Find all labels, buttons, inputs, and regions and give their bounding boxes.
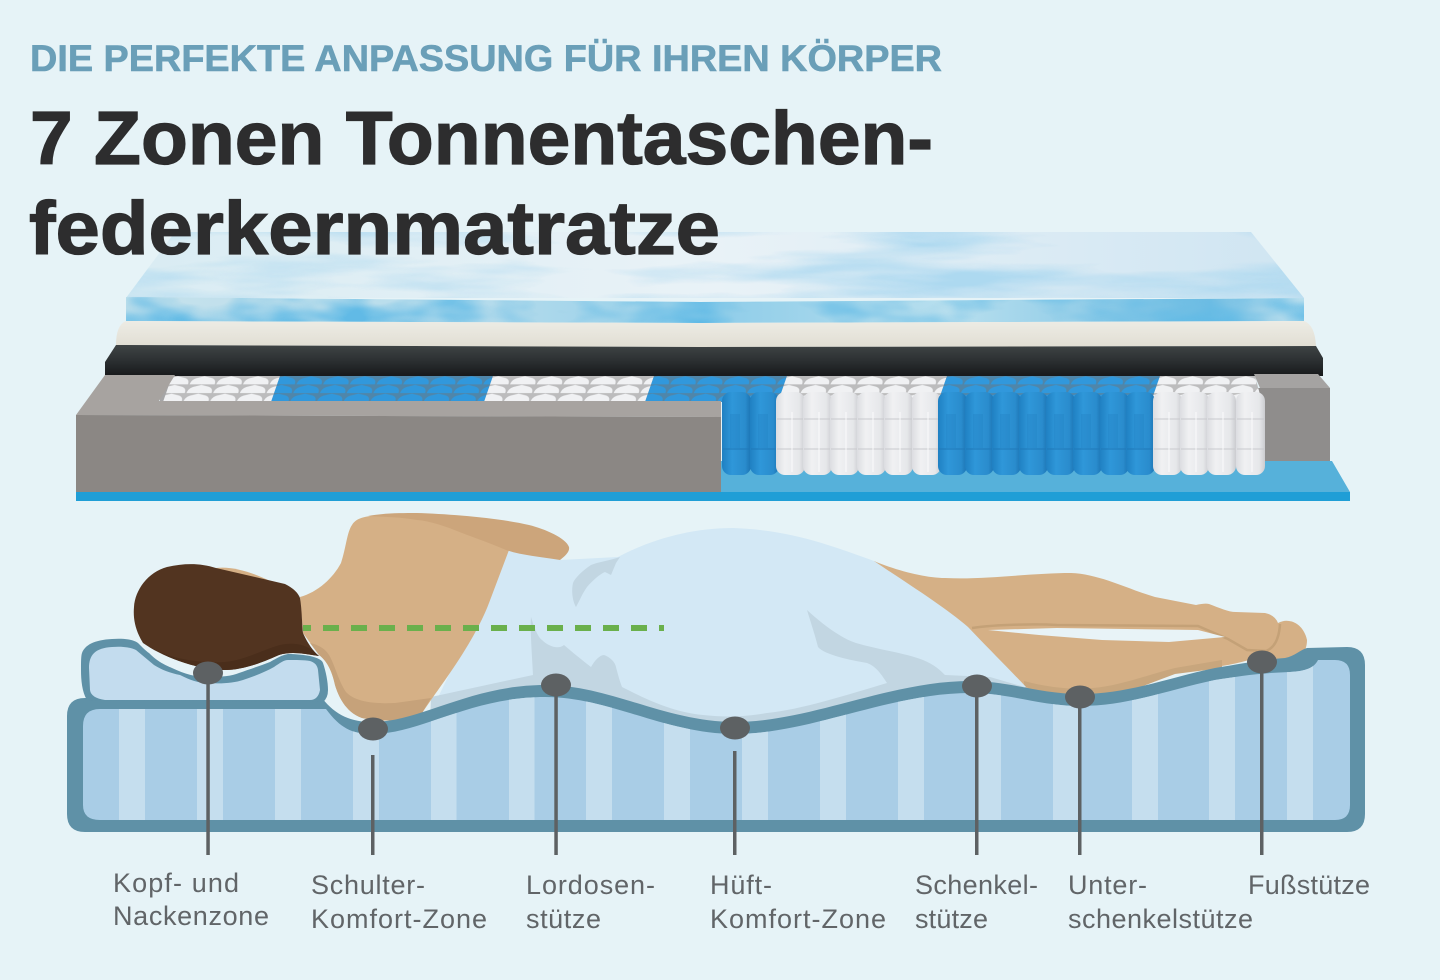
shirt fold shadow upper [572, 557, 620, 607]
upper arm [368, 513, 569, 560]
label: Schenkelstütze: Schenkel- [915, 870, 1038, 900]
label: Schenkelstütze: stütze [915, 904, 988, 934]
title: 7 Zonen Tonnentaschen- [30, 96, 933, 180]
shirt fold shadow lower left [430, 610, 1028, 740]
label: Schenkelstütze [915, 870, 1038, 934]
top foam front edge [126, 297, 1304, 323]
marker: thigh [962, 674, 992, 855]
label: Lordosenstütze [526, 870, 655, 934]
mattress cutaway photo [76, 232, 1350, 501]
label: Unterschenkelstütze [1068, 870, 1253, 934]
spring rows seen from above [160, 376, 1262, 402]
left grey foam border [76, 375, 721, 492]
marker: lower leg [1065, 686, 1095, 855]
label: Schulter-Komfort-Zone: Komfort-Zone [311, 904, 487, 934]
marker: hip [720, 716, 750, 855]
nightshirt [430, 528, 1028, 740]
label: Unterschenkelstütze: Unter- [1068, 870, 1147, 900]
hair [134, 564, 319, 670]
subtitle: DIE PERFEKTE ANPASSUNG FÜR IHREN KÖRPER [30, 38, 942, 79]
label: Schulter-Komfort-Zone [311, 870, 487, 934]
marker: foot [1247, 650, 1277, 855]
label: Hüft-Komfort-Zone: Hüft- [710, 870, 772, 900]
spine alignment dashed line [303, 625, 664, 631]
marker: shoulder [358, 718, 388, 855]
shoulder shadow [310, 643, 431, 721]
cream comfort layer [116, 321, 1316, 347]
tall pocket springs front row [722, 392, 1265, 475]
label: Kopf- und Nackenzone: Nackenzone [113, 901, 269, 931]
mattress zones with stripes [83, 650, 1350, 820]
label: Fußstütze: Fußstütze [1248, 870, 1370, 900]
label: Schulter-Komfort-Zone: Schulter- [311, 870, 425, 900]
label: Unterschenkelstütze: schenkelstütze [1068, 904, 1253, 934]
skin above the hair [216, 568, 272, 582]
mattress diagram [67, 647, 1365, 832]
pillow [81, 639, 328, 702]
marker: lordosis [541, 674, 571, 855]
marker: head and neck [193, 662, 223, 855]
black foam layer [105, 345, 1323, 376]
sleeping figure on the mattress [216, 513, 1307, 740]
right grey foam border [1254, 374, 1330, 461]
gap between the legs [988, 628, 1225, 642]
label: Lordosenstütze: stütze [526, 904, 601, 934]
label: Hüft-Komfort-Zone: Komfort-Zone [710, 904, 886, 934]
label: Lordosenstütze: Lordosen- [526, 870, 655, 900]
label: Kopf- und Nackenzone [113, 868, 269, 931]
blue base layer front edge [76, 492, 1350, 501]
legs [860, 561, 1307, 702]
title: federkernmatratze [29, 186, 720, 270]
blue base layer surface [721, 461, 1350, 492]
title [29, 96, 933, 270]
top foam upper surface [126, 232, 1304, 298]
label: Kopf- und Nackenzone: Kopf- und [113, 868, 239, 898]
mattress outer frame [67, 647, 1365, 832]
torso [300, 515, 509, 721]
label: Hüft-Komfort-Zone [710, 870, 886, 934]
